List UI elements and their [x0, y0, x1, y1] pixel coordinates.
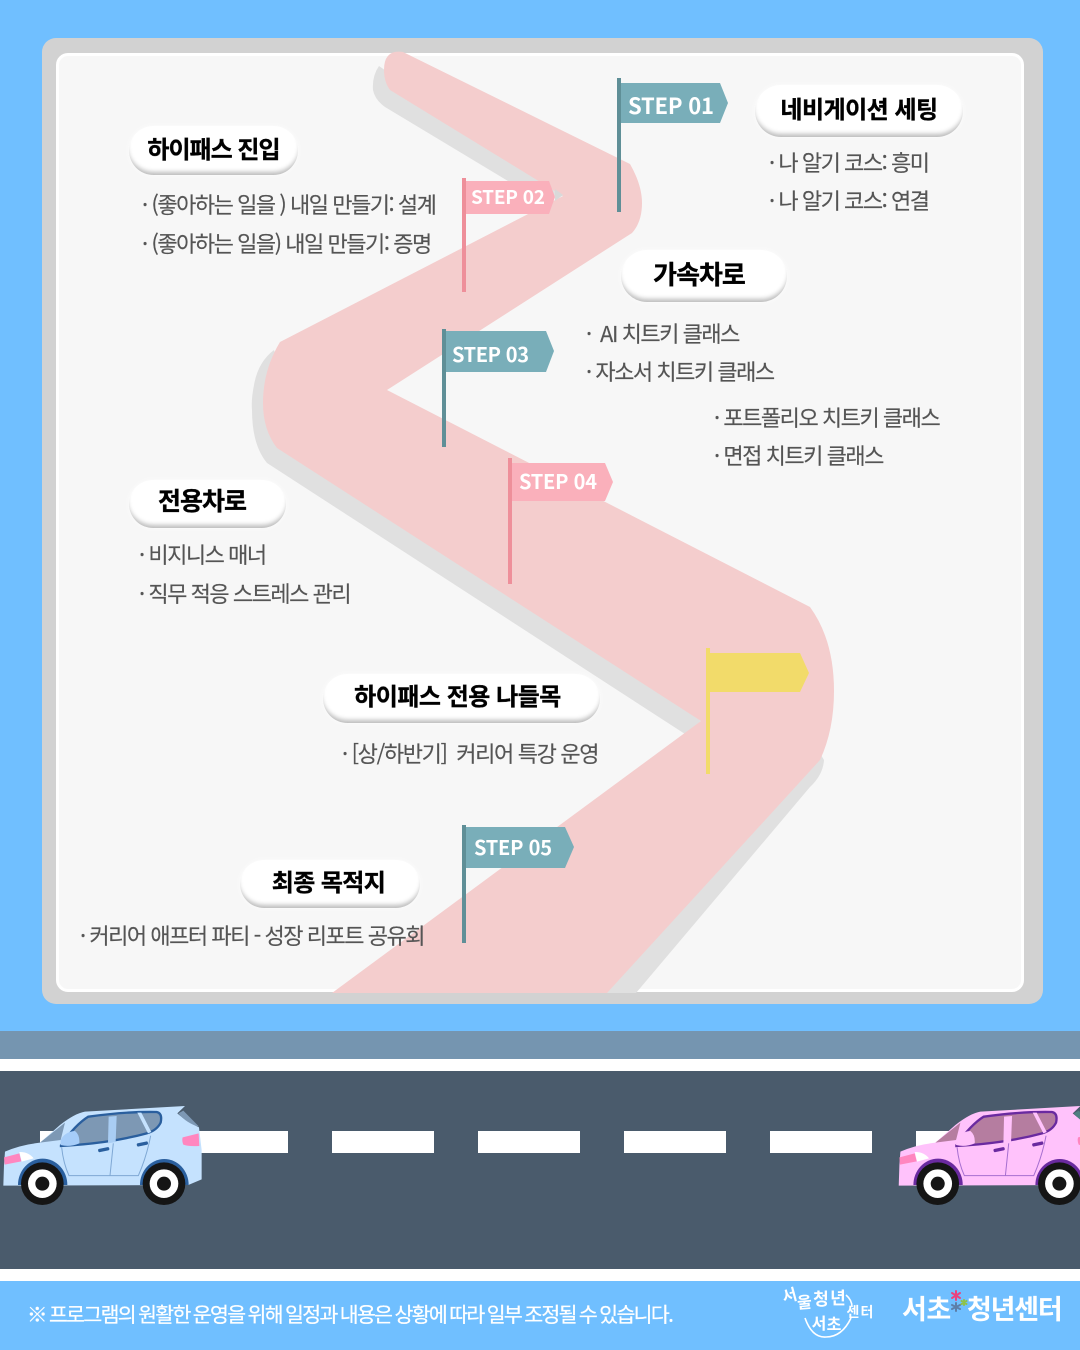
heading: 네비게이션 세팅: 네비게이션 세팅 — [780, 90, 938, 125]
road band: shoulder — [0, 1031, 1080, 1059]
text: 전용차로 items: · 직무 적응 스트레스 관리 — [139, 577, 350, 609]
text: 가속차로 items — [586, 317, 940, 471]
heading: 하이패스 진입: 하이패스 진입 — [147, 130, 280, 165]
text: 네비게이션 세팅 items: · 나 알기 코스: 연결 — [769, 184, 928, 216]
flag: step 03: STEP 03 — [452, 339, 529, 368]
heading: 전용차로 — [129, 480, 286, 528]
heading: 하이패스 전용 나들목 — [323, 674, 600, 723]
footnote: ※ 프로그램의 원활한 운영을 위해 일정과 내용은 상황에 따라 일부 조정될 수 있습니다. — [27, 1298, 672, 1328]
flag: step 01: STEP 01 — [628, 89, 714, 121]
logo: 서울청년센터 서초 mark: 센 — [847, 1302, 859, 1322]
road band: asphalt — [0, 1059, 1080, 1281]
panel: roadmap frame — [42, 38, 1043, 1004]
logo: 서울청년센터 서초 mark: 터 — [861, 1302, 873, 1322]
road surface — [263, 52, 834, 993]
logo: 서울청년센터 서초 mark: 청 — [813, 1285, 829, 1310]
heading: 가속차로 — [621, 250, 787, 302]
text: 가속차로 items: · 면접 치트키 클래스 — [714, 439, 883, 471]
text: 네비게이션 세팅 items — [769, 146, 928, 216]
text: 가속차로 items: · AI 치트키 클래스 — [586, 317, 739, 349]
logo: 서울청년센터 서초 mark: 초 — [827, 1311, 842, 1335]
text: 나들목 item: · [상/하반기] 커리어 특강 운영 — [342, 737, 598, 769]
text: 하이패스 진입 items: · (좋아하는 일을) 내일 만들기: 증명 — [142, 227, 431, 259]
flag: step 04: STEP 04 — [519, 466, 597, 495]
logo: 서초 청년센터 wordmark: 청년센터 — [967, 1288, 1062, 1327]
road shadow — [252, 66, 824, 993]
logo: 서울청년센터 서초 mark: 울 — [796, 1288, 813, 1314]
text: 전용차로 items — [139, 538, 350, 609]
logo: 서초 청년센터 wordmark: 서초 — [902, 1288, 951, 1327]
icon: stars — [952, 1291, 966, 1311]
text: 하이패스 진입 items — [142, 188, 435, 259]
heading: 전용차로: 전용차로 — [158, 482, 246, 518]
text: 최종 목적지 item: · 커리어 애프터 파티 - 성장 리포트 공유회 — [80, 919, 424, 951]
heading: 네비게이션 세팅 — [755, 85, 963, 137]
heading: 최종 목적지: 최종 목적지 — [272, 863, 385, 898]
text: 가속차로 items: · 포트폴리오 치트키 클래스 — [714, 401, 939, 433]
heading: 가속차로: 가속차로 — [653, 255, 745, 292]
logo: 서울청년센터 서초 mark: 서 — [812, 1310, 826, 1334]
text: 하이패스 진입 items: · (좋아하는 일을 ) 내일 만들기: 설계 — [142, 188, 435, 220]
panel: roadmap inner — [56, 53, 1024, 992]
flag: step 05: STEP 05 — [474, 832, 552, 861]
logo: 서울청년센터 서초 mark: 년 — [830, 1284, 846, 1309]
heading: 최종 목적지 — [240, 860, 420, 908]
heading: 하이패스 전용 나들목: 하이패스 전용 나들목 — [354, 677, 561, 712]
text: 가속차로 items: · 자소서 치트키 클래스 — [586, 355, 774, 387]
text: 전용차로 items: · 비지니스 매너 — [139, 538, 266, 570]
text: 네비게이션 세팅 items: · 나 알기 코스: 흥미 — [769, 146, 928, 178]
heading: 하이패스 진입 — [129, 126, 298, 175]
logo: 서울청년센터 서초 mark: 서 — [779, 1281, 799, 1308]
flag: step 02: STEP 02 — [471, 183, 545, 210]
